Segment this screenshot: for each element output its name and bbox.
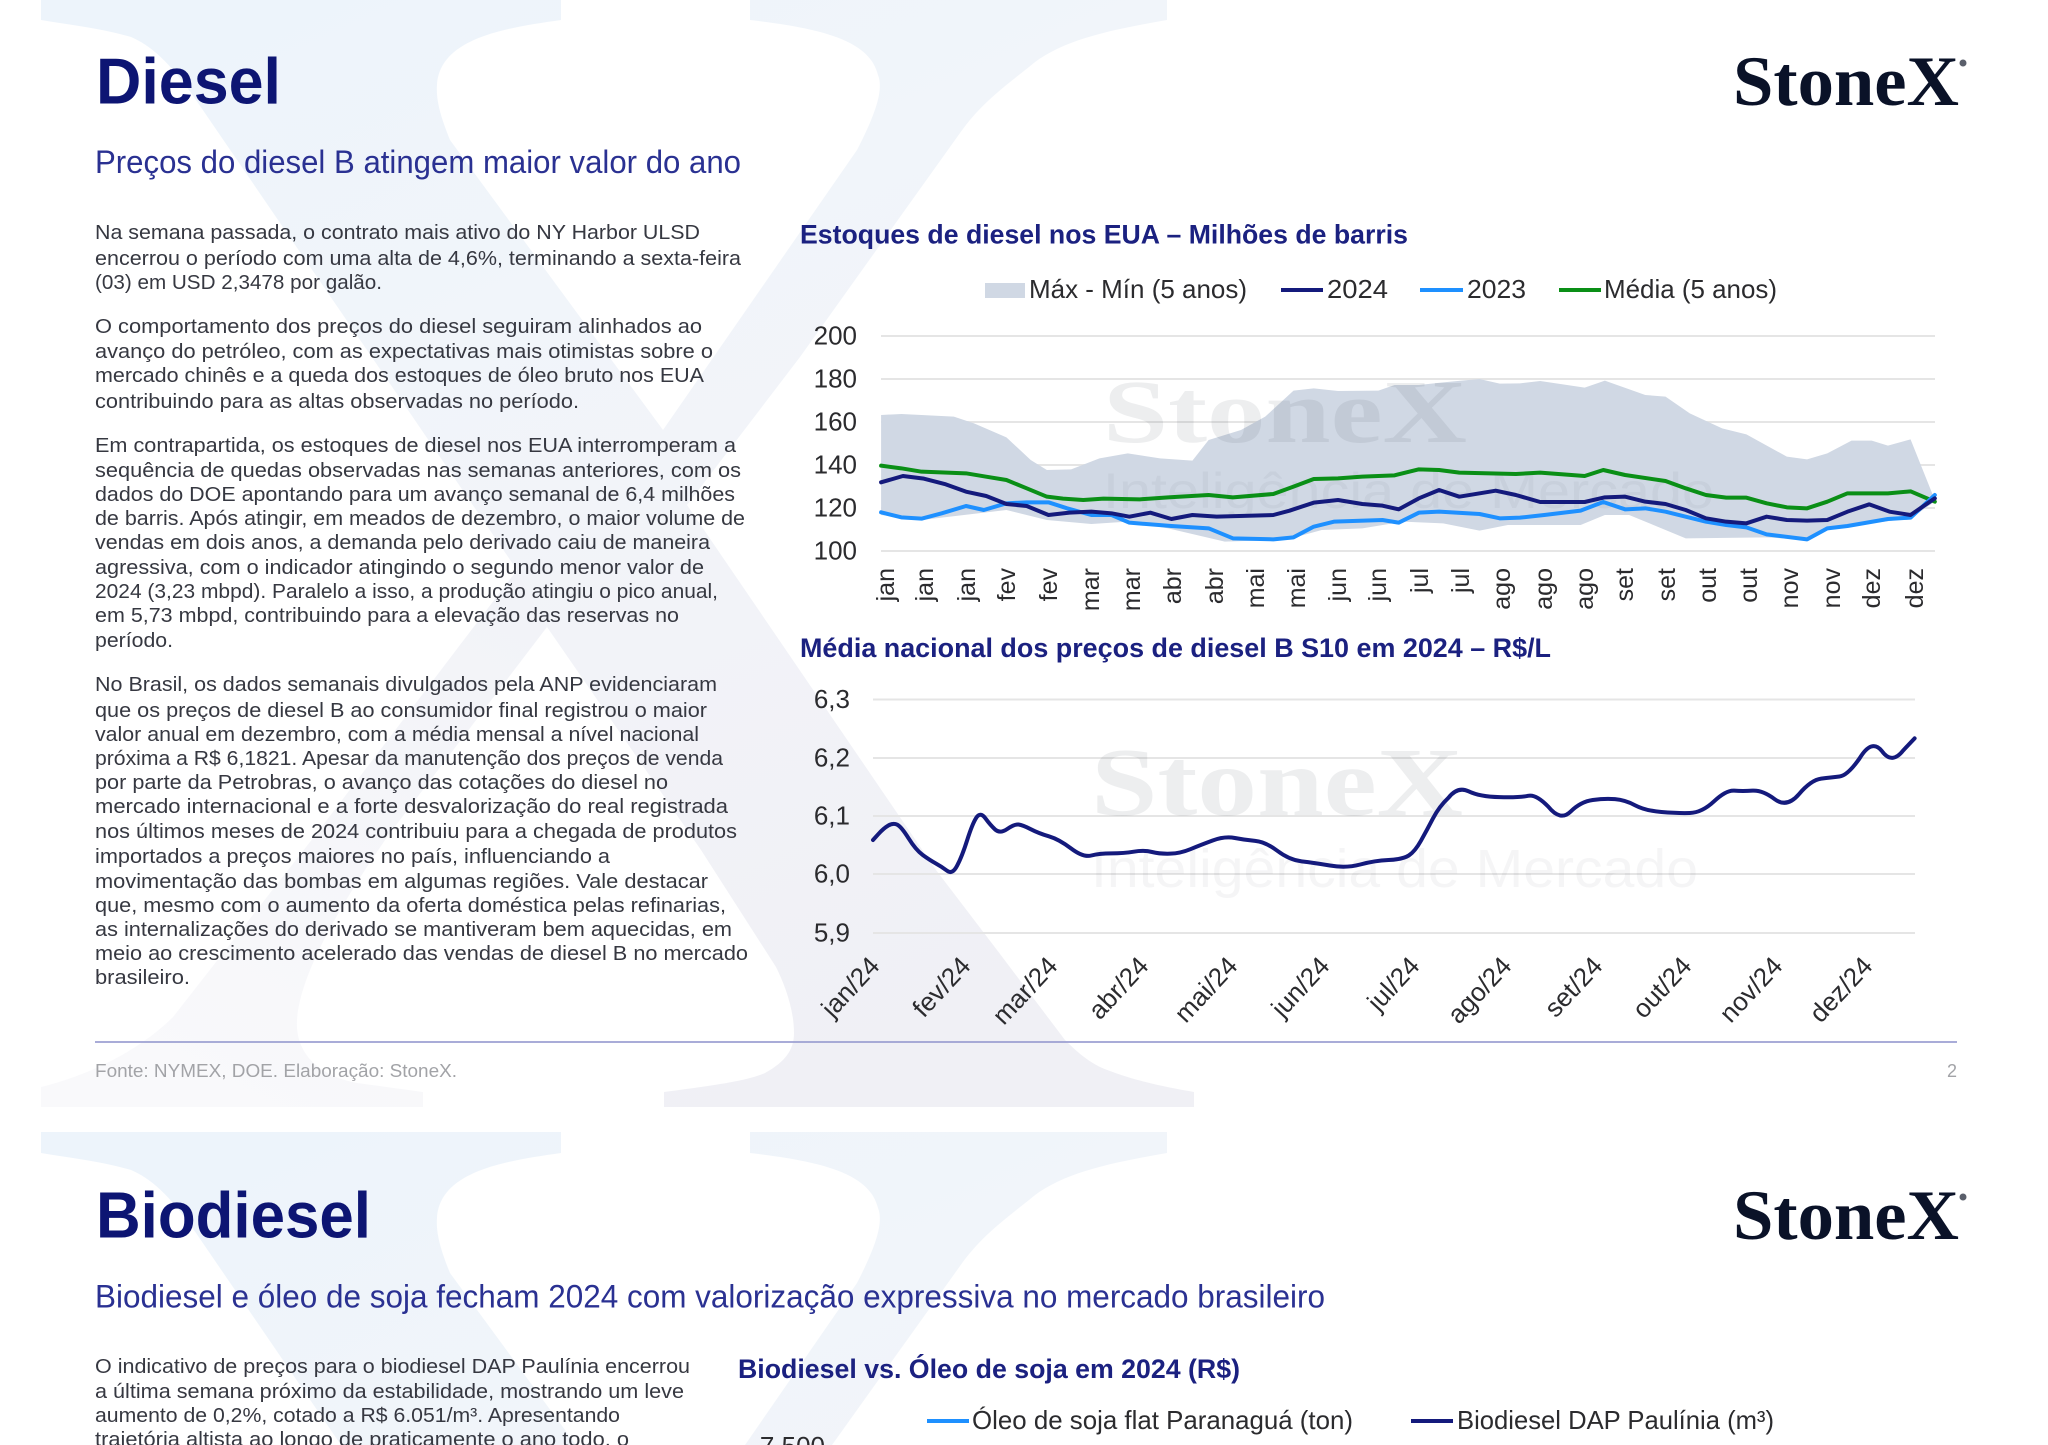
x axis labels: jun/24: [1264, 951, 1335, 1024]
x axis labels: mai: [1242, 568, 1270, 608]
legend: [927, 1405, 1774, 1435]
text block: body copy: sequência de quedas observadas nas semanas anteriores, com os: [95, 459, 741, 482]
y axis labels: 6,1: [814, 800, 850, 830]
line: 2024: [881, 476, 1935, 523]
y axis labels: 120: [814, 492, 857, 522]
text block: body copy: Na semana passada, o contrato mais ativo do NY Harbor ULSD: [95, 221, 700, 244]
text block: body copy: [95, 221, 748, 989]
legend: Biodiesel DAP Paulínia (m³): [1457, 1405, 1774, 1435]
x axis labels: nov: [1776, 568, 1804, 608]
x axis labels: set: [1653, 568, 1681, 601]
y axis labels: 160: [814, 406, 857, 436]
text block: body copy: O comportamento dos preços do diesel seguiram alinhados ao: [95, 315, 702, 338]
line: media 5 anos: [881, 466, 1935, 508]
chart: media nacional dos precos de diesel B S10: [814, 684, 1915, 1030]
x axis labels: [814, 951, 1878, 1030]
x axis labels: jan: [872, 568, 900, 602]
x axis labels: ago: [1571, 568, 1599, 610]
x axis labels: jan/24: [814, 951, 885, 1024]
x axis labels: mar: [1118, 568, 1146, 611]
title: Biodiesel: Biodiesel: [96, 1178, 371, 1252]
text block: body copy: agressiva, com o indicador atingindo o segundo menor valor de: [95, 556, 704, 579]
x axis labels: abr: [1201, 568, 1229, 604]
text block: body copy: período.: [95, 629, 173, 652]
x axis labels: out: [1694, 568, 1722, 603]
x axis labels: abr: [1159, 568, 1187, 604]
text block: body copy: Em contrapartida, os estoques de diesel nos EUA interromperam a: [95, 434, 737, 457]
watermark: page 1 X: [41, 0, 1194, 1107]
subtitle: Preços do diesel B atingem maior valor do ano: [95, 144, 741, 180]
page 1: Diesel: [95, 43, 1966, 1081]
text block: body copy: aumento de 0,2%, cotado a R$ 6.051/m³. Apresentando: [95, 1404, 620, 1427]
text block: body copy: as internalizações do derivado se mantiveram bem aquecidas, em: [95, 918, 732, 941]
y axis labels: 200: [814, 320, 857, 350]
x axis labels: ago: [1530, 568, 1558, 610]
chart title: media nacional: Média nacional dos preços de diesel B S10 em 2024 – R$/L: [800, 633, 1551, 663]
text block: body copy: No Brasil, os dados semanais divulgados pela ANP evidenciaram: [95, 673, 717, 696]
text block: body copy: próxima a R$ 6,1821. Apesar da manutenção dos preços de venda: [95, 747, 724, 770]
x axis labels: mai/24: [1168, 951, 1243, 1028]
chart watermark: [1103, 363, 1714, 519]
chart watermark: Inteligência de Mercado: [1103, 463, 1714, 519]
x axis labels: ago/24: [1441, 951, 1517, 1029]
text block: body copy: [95, 1355, 690, 1445]
legend: Média (5 anos): [1604, 274, 1777, 304]
y axis labels: 180: [814, 364, 857, 394]
x axis labels: jan: [953, 568, 981, 602]
legend: 2023: [1467, 274, 1526, 304]
text block: body copy: encerrou o período com uma alta de 4,6%, terminando a sexta-feira: [95, 247, 742, 270]
y axis labels: 6,2: [814, 742, 850, 772]
x axis labels: ago: [1488, 568, 1516, 610]
text block: body copy: mercado internacional e a forte desvalorização do real registrada: [95, 795, 729, 818]
chart title: biodiesel vs oleo de soja: Biodiesel vs. Óleo de soja em 2024 (R$): [738, 1353, 1240, 1384]
y axis labels: 100: [814, 536, 857, 566]
x axis labels: mai: [1283, 568, 1311, 608]
x axis labels: jun: [1324, 568, 1352, 602]
y axis labels: 6,0: [814, 858, 850, 888]
x axis labels: set/24: [1538, 951, 1608, 1023]
subtitle: Biodiesel e óleo de soja fecham 2024 com valorização expressiva no mercado brasileiro: [95, 1278, 1325, 1314]
y axis labels: [814, 684, 850, 948]
x axis labels: jun: [1364, 568, 1392, 602]
x axis labels: jul: [1406, 568, 1434, 594]
chart: estoques de diesel nos EUA: [814, 274, 1935, 611]
legend: Óleo de soja flat Paranaguá (ton): [972, 1405, 1353, 1435]
text block: body copy: valor anual em dezembro, com a média mensal a nível nacional: [95, 723, 699, 746]
legend: 2024: [1327, 274, 1388, 304]
text block: body copy: por parte da Petrobras, o avanço das cotações do diesel no: [95, 771, 668, 794]
area: max-min band: [881, 379, 1935, 542]
chart watermark: Inteligência de Mercado: [1091, 839, 1698, 899]
x axis labels: [872, 568, 1929, 611]
text block: body copy: dados do DOE apontando para um avanço semanal de 6,4 milhões: [95, 483, 735, 506]
y axis labels: 5,9: [814, 918, 850, 948]
text block: body copy: 2024 (3,23 mbpd). Paralelo a isso, a produção atingiu o pico anual,: [95, 580, 718, 603]
x axis labels: fev/24: [906, 951, 976, 1023]
chart title: estoques: Estoques de diesel nos EUA – Milhões de barris: [800, 220, 1408, 250]
line: 2023: [881, 495, 1935, 539]
chart watermark: StoneX: [1103, 363, 1467, 462]
x axis labels: fev: [993, 568, 1021, 601]
text block: body copy: que os preços de diesel B ao consumidor final registrou o maior: [95, 699, 707, 722]
x axis labels: dez: [1858, 568, 1886, 608]
page 2: Biodiesel: [95, 1177, 1966, 1445]
text block: body copy: O indicativo de preços para o biodiesel DAP Paulínia encerrou: [95, 1355, 690, 1378]
text block: body copy: avanço do petróleo, com as expectativas mais otimistas sobre o: [95, 340, 713, 363]
line: preco diesel: [873, 738, 1915, 872]
x axis labels: nov: [1818, 568, 1846, 608]
watermark: page 2 X: [41, 1132, 1167, 1445]
x axis labels: abr/24: [1082, 951, 1154, 1025]
text block: body copy: movimentação das bombas em algumas regiões. Vale destacar: [95, 870, 708, 893]
x axis labels: out/24: [1626, 951, 1697, 1024]
text block: body copy: de barris. Após atingir, em meados de dezembro, o maior volume de: [95, 507, 745, 530]
text block: body copy: meio ao crescimento acelerado das vendas de diesel B no mercado: [95, 942, 748, 965]
text block: body copy: a última semana próximo da estabilidade, mostrando um leve: [95, 1380, 684, 1403]
chart watermark: StoneX: [1091, 729, 1463, 837]
x axis labels: dez: [1901, 568, 1929, 608]
x axis labels: dez/24: [1803, 951, 1878, 1028]
text block: body copy: mercado chinês e a queda dos estoques de óleo bruto nos EUA: [95, 364, 704, 387]
text block: body copy: em 5,73 mbpd, contribuindo para a elevação das reservas no: [95, 604, 679, 627]
text block: body copy: (03) em USD 2,3478 por galão.: [95, 271, 382, 294]
x axis labels: nov/24: [1713, 951, 1788, 1028]
x axis labels: mar/24: [986, 951, 1063, 1030]
y axis labels: [814, 320, 857, 566]
x axis labels: mar: [1077, 568, 1105, 611]
x axis labels: set: [1611, 568, 1639, 601]
text block: body copy: importados a preços maiores no país, influenciando a: [95, 845, 611, 868]
legend: [985, 274, 1777, 304]
y axis labels: 140: [814, 450, 857, 480]
x axis labels: out: [1735, 568, 1763, 603]
footer: source: Fonte: NYMEX, DOE. Elaboração: StoneX.: [95, 1061, 457, 1081]
x axis labels: jan: [911, 568, 939, 602]
logo: StoneX: StoneX: [1733, 43, 1959, 121]
x axis labels: fev: [1035, 568, 1063, 601]
text block: body copy: que, mesmo com o aumento da oferta doméstica pelas refinarias,: [95, 894, 726, 917]
x axis labels: jul: [1447, 568, 1475, 594]
legend: Máx - Mín (5 anos): [1029, 274, 1247, 304]
logo: StoneX: StoneX: [1733, 1177, 1959, 1255]
y axis labels: 6,3: [814, 684, 850, 714]
text block: body copy: brasileiro.: [95, 966, 190, 989]
text block: body copy: contribuindo para as altas observadas no período.: [95, 390, 579, 413]
x axis labels: jul/24: [1360, 951, 1425, 1017]
chart watermark: [1091, 729, 1698, 899]
text block: body copy: vendas em dois anos, a demanda pelo derivado caiu de maneira: [95, 531, 711, 554]
text block: body copy: nos últimos meses de 2024 contribuiu para a chegada de produtos: [95, 820, 737, 843]
footer: page number: 2: [1947, 1061, 1957, 1081]
title: Diesel: Diesel: [96, 44, 281, 118]
